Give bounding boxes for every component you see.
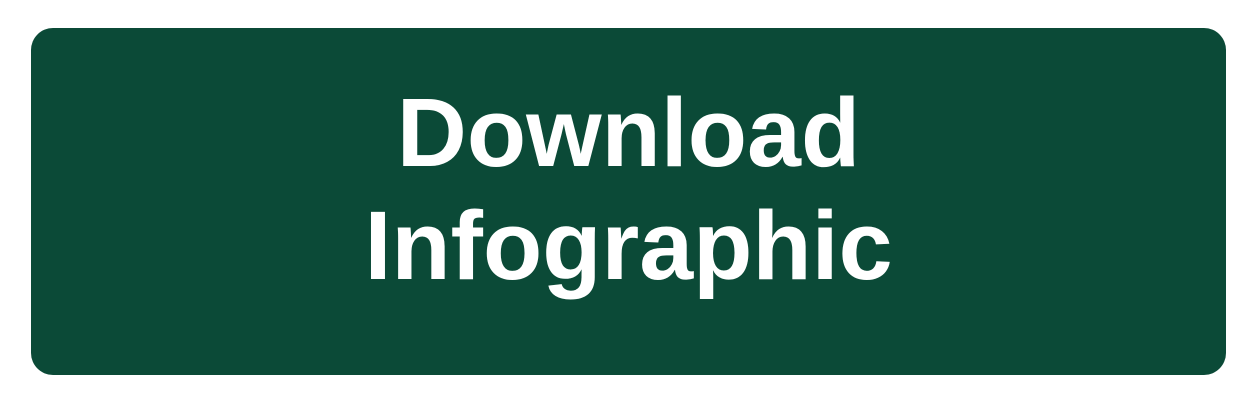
button label text: Infographic [364,191,893,300]
button label text [364,78,893,300]
button label text: Download [397,78,860,187]
